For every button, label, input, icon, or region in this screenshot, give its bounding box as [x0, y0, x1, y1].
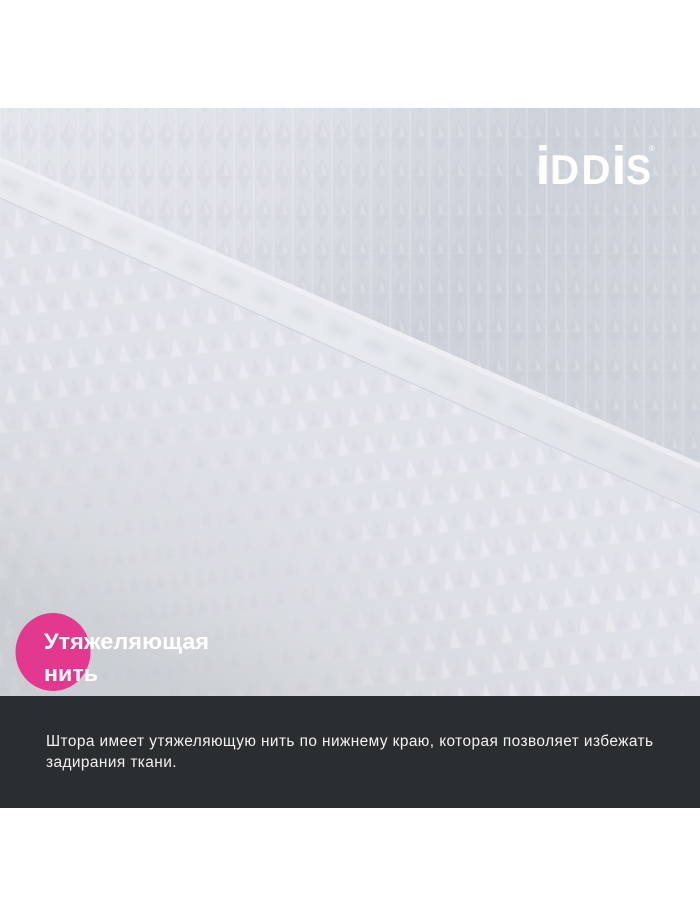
heading: Утяжеляющая нить: Утяжеляющая: [44, 629, 209, 654]
logo: iDDiS: i: [612, 136, 627, 196]
lower fabric layer with triangle weave: [0, 212, 700, 696]
photo panel: shower curtain fabric with logo and heading: [0, 108, 700, 696]
dark description band: [0, 696, 700, 808]
logo: iDDiS: [536, 136, 655, 196]
description text: [46, 733, 653, 771]
pink circle accent: [16, 613, 90, 691]
curtain hem with weighted thread: [0, 157, 700, 513]
infographic page: [0, 108, 700, 808]
logo: iDDiS: ®: [649, 144, 655, 153]
logo: iDDiS: D: [550, 146, 579, 193]
upper fabric layer with square grid weave: [0, 108, 700, 488]
logo: iDDiS: S: [626, 146, 651, 193]
description text: Штора имеет утяжеляющую нить по нижнему краю, которая позволяет избежать: [46, 733, 653, 750]
heading: Утяжеляющая нить: нить: [44, 661, 98, 686]
logo: iDDiS: i: [536, 136, 551, 196]
logo: iDDiS: D: [582, 146, 610, 193]
description text: задирания ткани.: [46, 754, 177, 771]
